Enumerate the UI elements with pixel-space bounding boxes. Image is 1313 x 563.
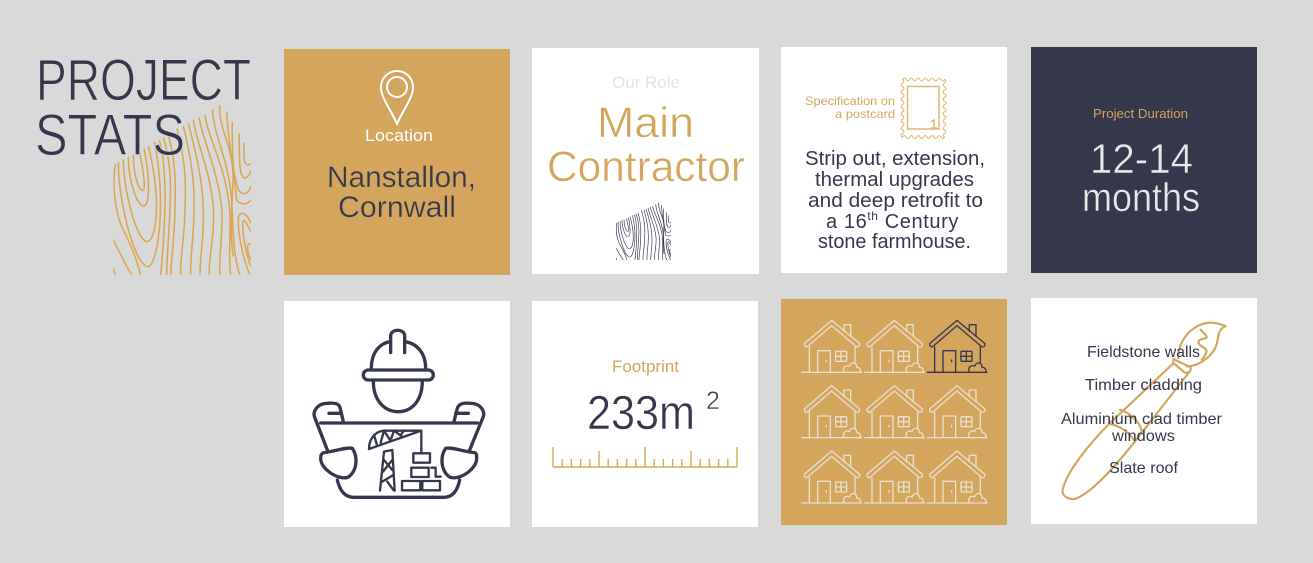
icon: ruler [553,447,737,467]
icon: map pin [381,71,413,124]
panel: our role [532,48,759,274]
panel: specification [781,47,1007,273]
duration value: 12-14 [1090,135,1193,182]
materials list [1061,344,1223,477]
location value: Nanstallon, [327,161,476,194]
panel: materials [1031,298,1257,524]
icon: paintbrush [1063,323,1226,499]
materials list: windows [1111,428,1175,445]
icon: builder holding plans [314,330,484,497]
specification text: Century [879,211,959,233]
specification label: a postcard [835,107,895,121]
specification text: and deep retrofit to [808,190,983,212]
role label: Our Role [612,73,680,92]
specification text [805,148,985,253]
title [35,48,251,168]
duration label: Project Duration [1093,106,1188,121]
footprint value: 233m [587,387,695,440]
role value: Main [597,99,694,147]
specification text: a 16 [826,211,867,233]
panel: footprint [532,301,758,527]
role value [547,99,745,191]
footprint label: Footprint [612,357,679,376]
icon: postage stamp [901,78,946,139]
materials list: Slate roof [1109,460,1179,477]
panel: location [284,49,510,275]
title: PROJECT [36,48,251,113]
duration value: months [1082,176,1200,220]
location label: Location [365,126,433,145]
panel: project duration [1031,47,1257,273]
specification text: th [867,209,879,223]
materials list: Aluminium clad timber [1061,411,1223,428]
specification text: stone farmhouse. [818,231,971,253]
icon: wood grain [616,203,671,260]
panel: houses [781,299,1007,525]
role value: Contractor [547,143,745,191]
icon: grid of nine houses, one highlighted [802,320,987,503]
specification label: Specification on [805,94,895,108]
specification text: Strip out, extension, [805,148,985,170]
panel: builder icon [284,301,510,527]
location value [327,161,476,224]
materials list: Timber cladding [1085,377,1202,394]
title: STATS [35,103,185,168]
footprint value: 2 [706,387,720,415]
duration value [1082,135,1200,220]
location value: Cornwall [338,191,456,224]
materials list: Fieldstone walls [1087,344,1200,361]
specification label [805,94,895,121]
specification text: thermal upgrades [815,169,974,191]
wood grain decoration [113,105,251,275]
